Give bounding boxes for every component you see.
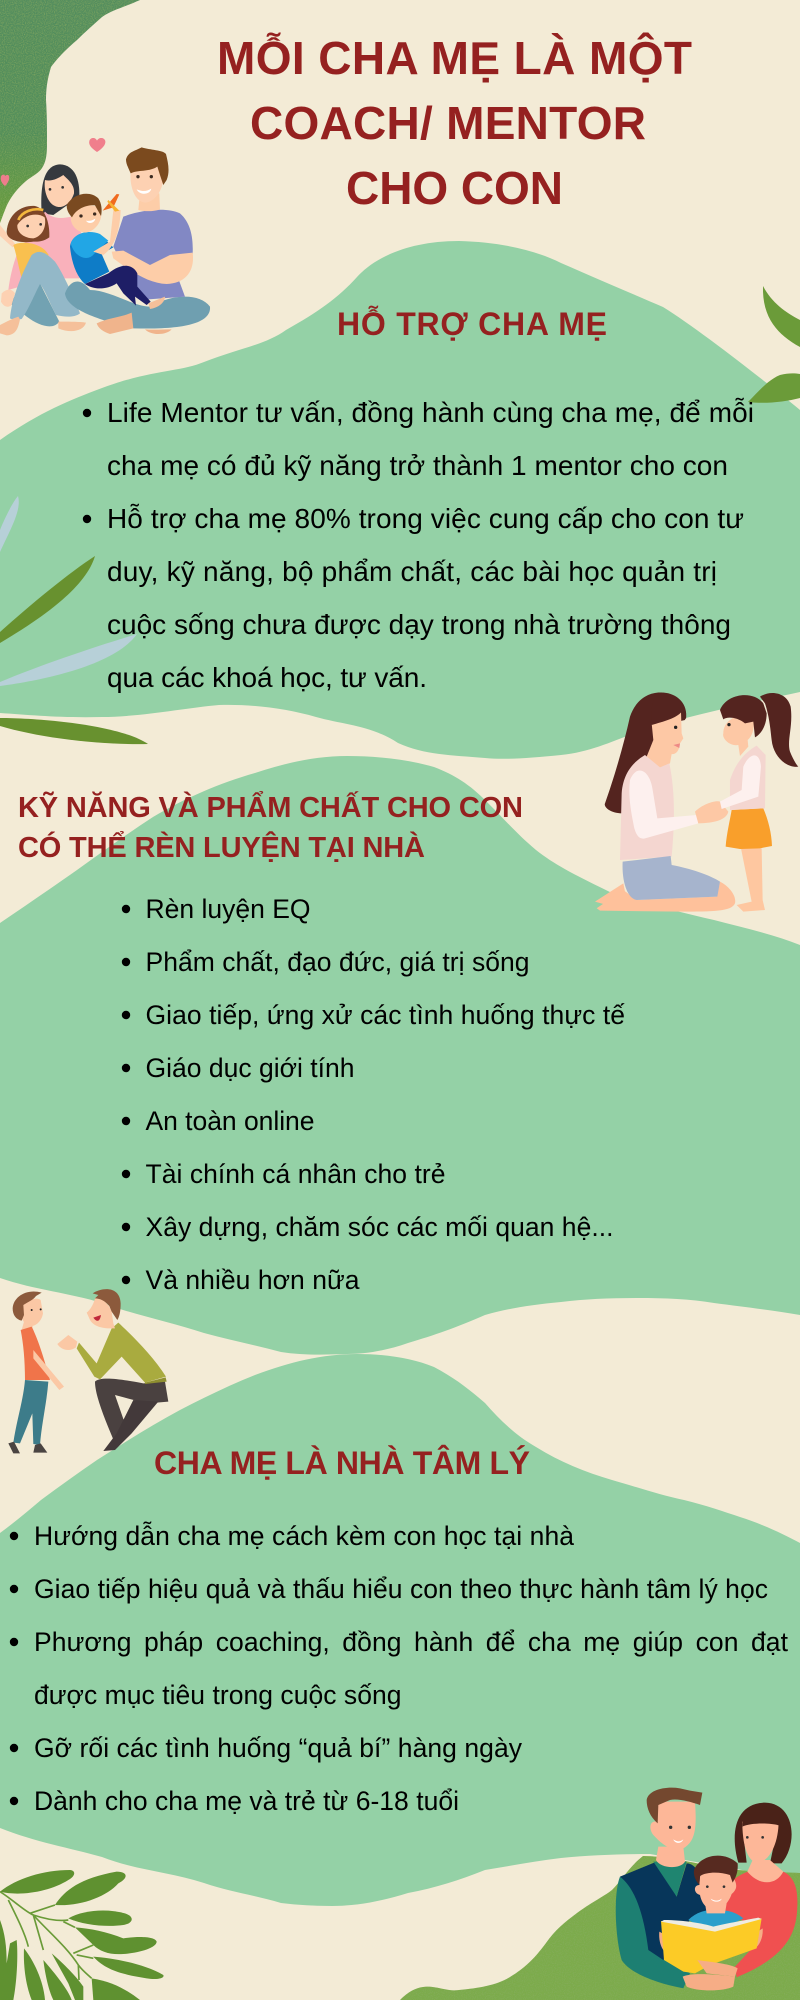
text block: section 1 list: cha mẹ có đủ kỹ năng trở thành 1 mentor cho con (107, 450, 728, 481)
text block: section 2 list: Tài chính cá nhân cho trẻ (146, 1159, 446, 1189)
text block: section 1 list: qua các khoá học, tư vấn. (107, 662, 427, 693)
title: CHO CON (346, 162, 563, 214)
blob: section 3 background (0, 1354, 800, 1906)
text block: section 3 list: Hướng dẫn cha mẹ cách kèm con học tại nhà (34, 1521, 574, 1551)
text block: section 2 list: An toàn online (146, 1106, 314, 1136)
illustration: family of four (0, 138, 210, 335)
text block: section 2 list: Xây dựng, chăm sóc các mối quan hệ... (146, 1212, 614, 1242)
title (217, 32, 692, 214)
text block: section 2 list: Và nhiều hơn nữa (146, 1265, 360, 1295)
text block: section 3 list: Dành cho cha mẹ và trẻ từ 6-18 tuổi (34, 1786, 459, 1816)
illustration: father talking with son (8, 1289, 168, 1453)
text block: section 1 list: Life Mentor tư vấn, đồng hành cùng cha mẹ, để mỗi (107, 397, 754, 428)
blob: section 1 background (0, 241, 800, 759)
blob: bottom-right grass (400, 1856, 800, 2000)
text block: section 3 list: Gỡ rối các tình huống “quả bí” hàng ngày (34, 1733, 523, 1763)
text block: section 3 list: Phương pháp coaching, đồng hành để cha mẹ giúp con đạt (34, 1627, 789, 1657)
text block: section 1 list: duy, kỹ năng, bộ phẩm chất, các bài học quản trị (107, 556, 717, 587)
blob: top-left dark green (0, 0, 140, 223)
text block: section 2 list: Rèn luyện EQ (146, 894, 310, 924)
icon: bottom-left leaf branch (0, 1870, 164, 2000)
heading: Hỗ trợ cha mẹ: HỖ TRỢ CHA MẸ (337, 306, 607, 342)
text block: section 2 list (122, 894, 625, 1295)
text block: section 3 list: được mục tiêu trong cuộc sống (34, 1680, 402, 1710)
text block: section 3 list: Giao tiếp hiệu quả và thấu hiểu con theo thực hành tâm lý học (34, 1574, 768, 1604)
text block: section 2 list: Giáo dục giới tính (146, 1053, 354, 1083)
text block: section 2 list: Giao tiếp, ứng xử các tình huống thực tế (146, 1000, 625, 1030)
icon: left leaves (0, 496, 148, 744)
heading: Kỹ năng và phẩm chất (18, 790, 523, 864)
text block: section 1 list: Hỗ trợ cha mẹ 80% trong việc cung cấp cho con tư (107, 503, 744, 534)
title: COACH/ MENTOR (250, 97, 646, 149)
text block: section 3 list (10, 1521, 789, 1816)
illustration: parents reading a book with child (616, 1788, 797, 1990)
icon: right leaves (748, 286, 800, 403)
illustration: mother and daughter (595, 693, 798, 912)
blob: section 2 background (0, 756, 800, 1355)
text block: section 2 list: Phẩm chất, đạo đức, giá trị sống (146, 947, 530, 977)
title: MỖI CHA MẸ LÀ MỘT (217, 32, 692, 84)
heading: Cha mẹ là nhà tâm lý: CHA MẸ LÀ NHÀ TÂM LÝ (154, 1445, 530, 1481)
text block: section 1 list (83, 397, 754, 693)
heading: Kỹ năng và phẩm chất: KỸ NĂNG VÀ PHẨM CHẤT CHO CON (18, 790, 523, 824)
text block: section 1 list: cuộc sống chưa được dạy trong nhà trường thông (107, 609, 731, 640)
heading: Kỹ năng và phẩm chất: CÓ THỂ RÈN LUYỆN TẠI NHÀ (18, 830, 425, 864)
